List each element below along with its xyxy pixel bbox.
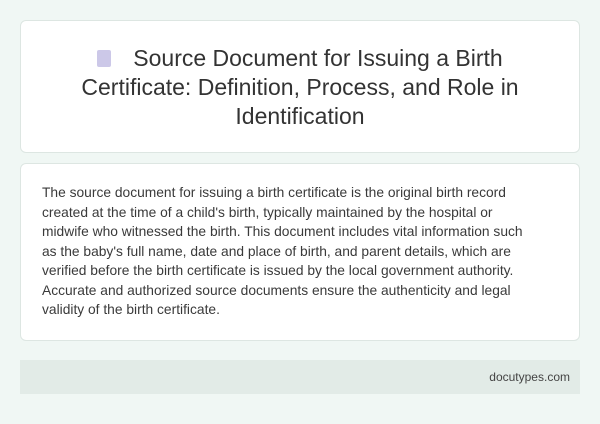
text block: Accurate and authorized source documents ensure the authenticity and legal <box>42 282 511 298</box>
footer bar <box>20 360 580 394</box>
text block: midwife who witnessed the birth. This document includes vital information such <box>42 224 523 239</box>
icon: document <box>97 50 111 67</box>
footer text: docutypes.com <box>489 370 570 384</box>
text block: verified before the birth certificate is issued by the local government authority. <box>42 263 513 278</box>
text block: as the baby's full name, date and place of birth, and parent details, which are <box>42 244 511 258</box>
panel: description <box>20 163 580 341</box>
text block <box>42 185 523 317</box>
panel: title card <box>20 20 580 153</box>
text block: created at the time of a child's birth, typically maintained by the hospital or <box>42 204 493 220</box>
text block: validity of the birth certificate. <box>42 302 220 317</box>
title: Source Document for Issuing a Birth Certificate: Definition, Process, and Role in Identification <box>81 45 519 129</box>
text block: The source document for issuing a birth certificate is the original birth record <box>42 185 506 200</box>
